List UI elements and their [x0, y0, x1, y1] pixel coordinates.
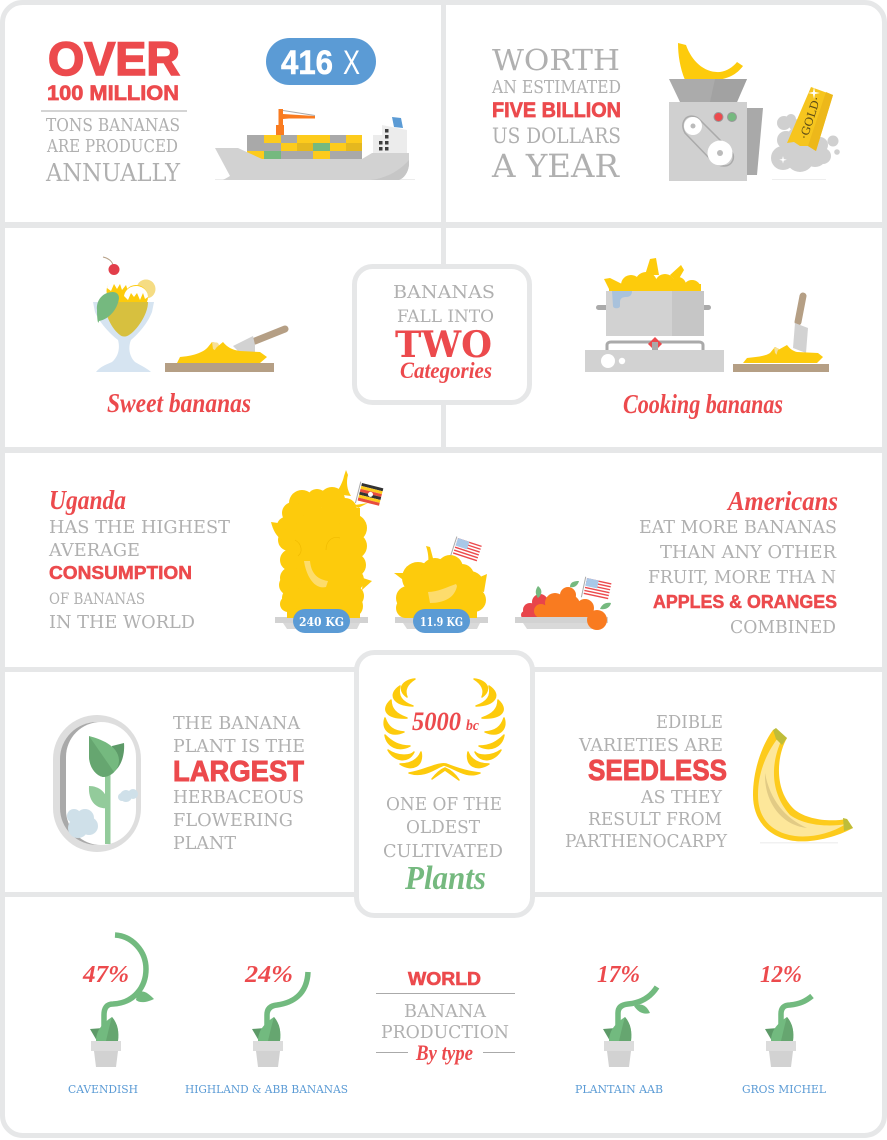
- panel: worth five billion: [491, 43, 840, 185]
- text: tons bananas produced annually: ARE PRODUCED: [46, 137, 178, 157]
- badge: 416 x: 416: [281, 44, 333, 82]
- text: edible varieties seedless: [565, 712, 728, 852]
- callout: two categories: TWO: [395, 324, 492, 366]
- callout: two categories: Categories: [400, 358, 492, 383]
- panel: production volume: [41, 32, 415, 187]
- label: highland and abb bananas: HIGHLAND & ABB BANANAS: [185, 1083, 348, 1096]
- text: one of the oldest cultivated: OLDEST: [406, 817, 480, 838]
- panel: uganda consumption text: CONSUMPTION: [49, 563, 192, 583]
- panel: americans text: THAN ANY OTHER: [660, 542, 836, 563]
- heading: over 100 million: OVER: [48, 32, 180, 85]
- label: plants: Plants: [404, 860, 486, 897]
- panel: uganda consumption text: OF BANANAS: [49, 590, 145, 608]
- icon: laurel wreath: [384, 679, 505, 780]
- chart: apples and oranges plate: [515, 577, 612, 630]
- text: edible varieties seedless: PARTHENOCARPY: [565, 831, 728, 852]
- callout: 5000 bc oldest cultivated plants: [356, 652, 532, 916]
- flag: usa (bananas): [450, 536, 482, 564]
- text: edible varieties seedless: EDIBLE: [656, 712, 723, 733]
- icon: banana machine: [669, 43, 840, 181]
- label: cavendish: CAVENDISH: [68, 1083, 138, 1096]
- panel: americans text: Americans: [726, 486, 838, 516]
- text: largest herbaceous flowering plant: [173, 713, 305, 854]
- text: worth five billion us dollars a year: A YEAR: [491, 147, 620, 185]
- icon: plant in window: [53, 715, 141, 852]
- value: 12%: 12%: [760, 962, 802, 988]
- text: one of the oldest cultivated: [383, 794, 503, 862]
- icon: container ship: [215, 109, 415, 180]
- panel: uganda consumption text: [48, 485, 230, 633]
- plant: highland and abb 24%: [185, 962, 348, 1096]
- text: tons bananas produced annually: ANNUALLY: [45, 159, 181, 187]
- text: worth five billion us dollars a year: FIVE BILLION: [492, 99, 621, 122]
- heading: world banana production by type: [376, 969, 515, 1065]
- text: one of the oldest cultivated: ONE OF THE: [386, 794, 502, 815]
- text: worth five billion us dollars a year: WORTH: [492, 43, 620, 77]
- text: edible varieties seedless: SEEDLESS: [588, 755, 727, 787]
- heading: over 100 million: 100 MILLION: [47, 82, 179, 105]
- panel: americans text: FRUIT, MORE THA N: [648, 567, 836, 588]
- chart: us banana pile 11.9 kg: [394, 536, 488, 633]
- text: largest herbaceous flowering plant: THE BANANA: [173, 713, 301, 734]
- panel: uganda consumption text: IN THE WORLD: [49, 612, 195, 633]
- heading: world banana production by type: WORLD: [408, 969, 481, 989]
- panel: cooking bananas: [585, 258, 829, 419]
- callout: two categories: FALL INTO: [397, 307, 494, 326]
- panel: americans text: COMBINED: [730, 617, 836, 638]
- panel: uganda consumption text: AVERAGE: [48, 540, 140, 561]
- year: 5000 bc: 5000: [412, 707, 461, 736]
- heading: world banana production by type: PRODUCTION: [381, 1022, 509, 1043]
- label: gros michel: GROS MICHEL: [742, 1083, 827, 1096]
- value: 24%: 24%: [244, 962, 293, 988]
- badge: 240 kg: 240 KG: [299, 615, 344, 629]
- badge: 11.9 kg: 11.9 KG: [420, 615, 463, 629]
- text: largest herbaceous flowering plant: HERBACEOUS: [173, 787, 304, 808]
- label: sweet bananas: Sweet bananas: [107, 388, 251, 418]
- chart: uganda banana pile 240 kg: [271, 470, 384, 633]
- badge: 240 kg: [293, 609, 350, 633]
- text: worth five billion us dollars a year: [491, 43, 621, 185]
- value: 47%: 47%: [82, 962, 129, 988]
- label: plantain aab: PLANTAIN AAB: [575, 1083, 663, 1096]
- text: worth five billion us dollars a year: AN ESTIMATED: [491, 78, 621, 98]
- callout: two categories: BANANAS: [393, 282, 495, 303]
- heading: world banana production by type: By type: [415, 1040, 473, 1065]
- text: one of the oldest cultivated: CULTIVATED: [383, 841, 503, 862]
- icon: banana: [753, 728, 853, 844]
- icon: banana machine: ·GOLD·: [797, 95, 823, 141]
- icon: banana on cutting board with knife: [165, 329, 285, 372]
- icon: banana and upright knife: [733, 296, 829, 372]
- badge: 416 x: X: [343, 44, 360, 82]
- panel: sweet bananas: [93, 257, 285, 418]
- panel: americans text: EAT MORE BANANAS: [639, 517, 837, 538]
- flag: uganda: [355, 482, 384, 509]
- badge: 416 x: [266, 38, 376, 85]
- plant: cavendish 47%: [68, 935, 154, 1096]
- text: tons bananas produced annually: [45, 116, 181, 187]
- text: largest herbaceous flowering plant: PLANT: [173, 833, 236, 854]
- text: tons bananas produced annually: TONS BANANAS: [46, 116, 180, 136]
- year: 5000 bc: bc: [466, 718, 479, 734]
- text: worth five billion us dollars a year: US DOLLARS: [492, 124, 621, 148]
- panel: world banana production by type: [68, 935, 827, 1096]
- text: edible varieties seedless: AS THEY: [640, 787, 723, 808]
- panel: uganda consumption text: HAS THE HIGHEST: [49, 517, 230, 538]
- panel: uganda consumption text: Uganda: [49, 485, 126, 515]
- text: edible varieties seedless: RESULT FROM: [588, 809, 722, 830]
- text: largest herbaceous flowering plant: PLANT IS THE: [173, 736, 305, 757]
- panel: americans text: APPLES & ORANGES: [653, 592, 837, 612]
- label: cooking bananas: Cooking bananas: [623, 389, 783, 419]
- icon: ice cream sundae: [93, 257, 156, 372]
- value: 17%: 17%: [597, 962, 640, 988]
- text: largest herbaceous flowering plant: LARGEST: [173, 756, 304, 788]
- plant: gros michel 12%: [742, 962, 827, 1096]
- plant: plantain aab 17%: [575, 962, 663, 1096]
- icon: pot on stove: [585, 258, 724, 372]
- panel: americans text: [639, 486, 838, 638]
- text: largest herbaceous flowering plant: FLOWERING: [173, 810, 293, 831]
- callout: two categories: [354, 266, 530, 402]
- heading: world banana production by type: BANANA: [404, 1001, 487, 1022]
- text: edible varieties seedless: VARIETIES ARE: [578, 735, 723, 756]
- flag: usa (fruit): [581, 577, 612, 603]
